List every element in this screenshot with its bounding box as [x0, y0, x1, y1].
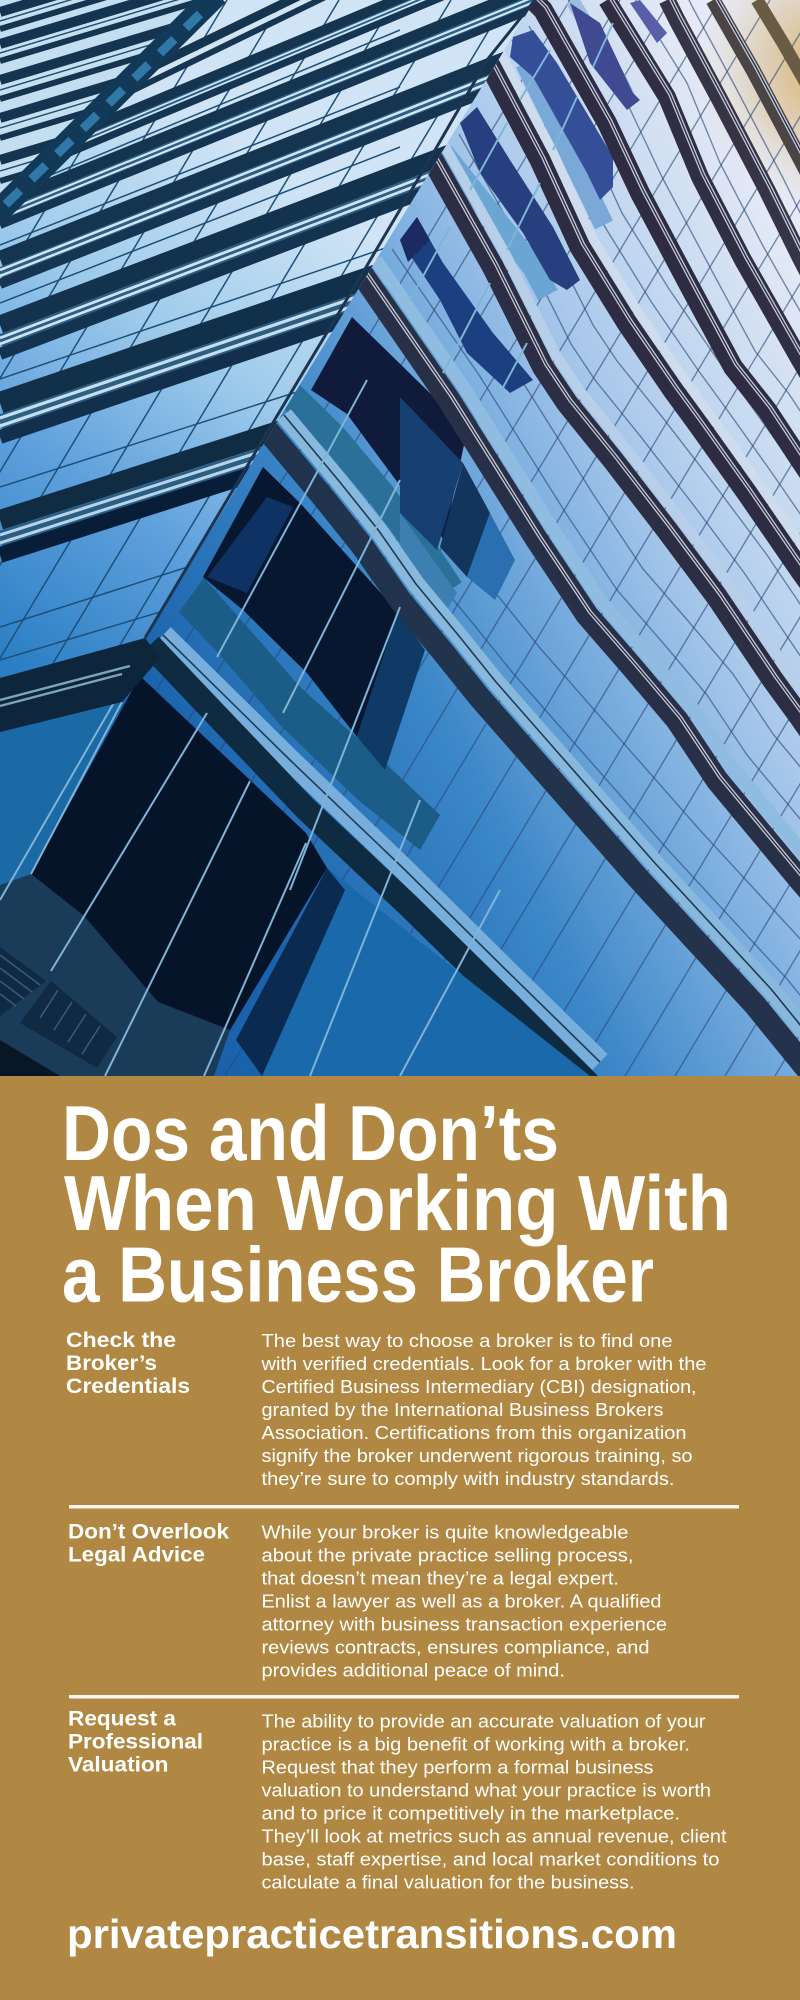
main title: Dos and Don’ts [62, 1089, 559, 1177]
floor beams and louvres [150, 0, 800, 1085]
floor band 2 [0, 264, 374, 444]
section 2 body text: attorney with business transaction experience [262, 1614, 667, 1634]
section 1 body text: signify the broker underwent rigorous training, so [262, 1446, 692, 1466]
section 3 body text: practice is a big benefit of working with a broker. [262, 1734, 690, 1754]
section 1 heading: Credentials [66, 1375, 190, 1398]
window bands between floors [179, 0, 667, 850]
section 3 body text: calculate a final valuation for the business. [262, 1872, 634, 1892]
section 2 body text: While your broker is quite knowledgeable [262, 1522, 628, 1542]
gold text panel background [0, 1076, 800, 2000]
floor band 3 [0, 145, 446, 360]
main title [62, 1089, 731, 1318]
floor band 5 [0, 0, 560, 225]
section 3 heading: Request a [68, 1708, 176, 1730]
section 1 body text: granted by the International Business Brokers [262, 1400, 664, 1420]
section 1 heading [66, 1329, 190, 1398]
section 2 heading: Legal Advice [68, 1544, 205, 1566]
section 1 body text: with verified credentials. Look for a broker with the [260, 1354, 706, 1374]
hero photo: glass office tower [0, 0, 800, 1085]
upper left secondary wing [0, 0, 220, 216]
footer website url: privatepracticetransitions.com [67, 1911, 677, 1957]
section 2 body text: reviews contracts, ensures compliance, and [262, 1638, 650, 1658]
divider 1 [69, 1505, 739, 1508]
section 3 body text: The ability to provide an accurate valuation of your [262, 1712, 706, 1732]
section 1 body text: they’re sure to comply with industry standards. [262, 1469, 674, 1489]
ground-floor dark windows and panels [0, 676, 590, 1076]
section 3 body text: They’ll look at metrics such as annual revenue, client [262, 1826, 726, 1846]
section 3 body text: Request that they perform a formal business [262, 1758, 654, 1778]
floor band 6 [71, 0, 444, 156]
section 1 body text: Certified Business Intermediary (CBI) designation, [262, 1377, 696, 1397]
section 2 heading [68, 1520, 229, 1566]
right building face [0, 0, 800, 1085]
section 1 body text [260, 1331, 706, 1489]
section 3 body text: and to price it competitively in the marketplace. [262, 1804, 680, 1824]
section 1 heading: Broker’s [66, 1352, 157, 1375]
floor band 7 [134, 0, 326, 94]
section 3 body text [262, 1712, 726, 1892]
floor band 1 [0, 420, 278, 563]
main title: a Business Broker [62, 1230, 654, 1318]
section 2 heading: Don’t Overlook [68, 1520, 229, 1544]
section 2 body text: about the private practice selling process, [262, 1546, 634, 1566]
section 3 heading: Valuation [68, 1754, 168, 1776]
section 3 body text: valuation to understand what your practice is worth [262, 1780, 711, 1800]
light bands beside the corner [290, 0, 632, 590]
section 3 heading: Professional [68, 1730, 203, 1754]
section 2 body text: Enlist a lawyer as well as a broker. A qualified [262, 1592, 662, 1612]
section 1 heading: Check the [66, 1329, 176, 1352]
building corner edge [145, 0, 535, 638]
section 1 body text: Association. Certifications from this organization [262, 1423, 686, 1443]
section 2 body text: provides additional peace of mind. [262, 1660, 565, 1680]
section 2 body text: that doesn’t mean they’re a legal expert. [262, 1568, 619, 1588]
section 3 body text: base, staff expertise, and local market conditions to [262, 1850, 720, 1870]
section 3 heading [68, 1708, 203, 1776]
main title: When Working With [64, 1159, 731, 1247]
section 2 body text [262, 1522, 667, 1680]
left building face [0, 0, 533, 664]
divider 2 [69, 1695, 739, 1698]
section 1 body text: The best way to choose a broker is to find one [262, 1331, 672, 1351]
floor band 4 [0, 52, 504, 289]
mullions on dark glass [0, 23, 613, 1076]
lowest left floor band at the corner [0, 638, 160, 732]
